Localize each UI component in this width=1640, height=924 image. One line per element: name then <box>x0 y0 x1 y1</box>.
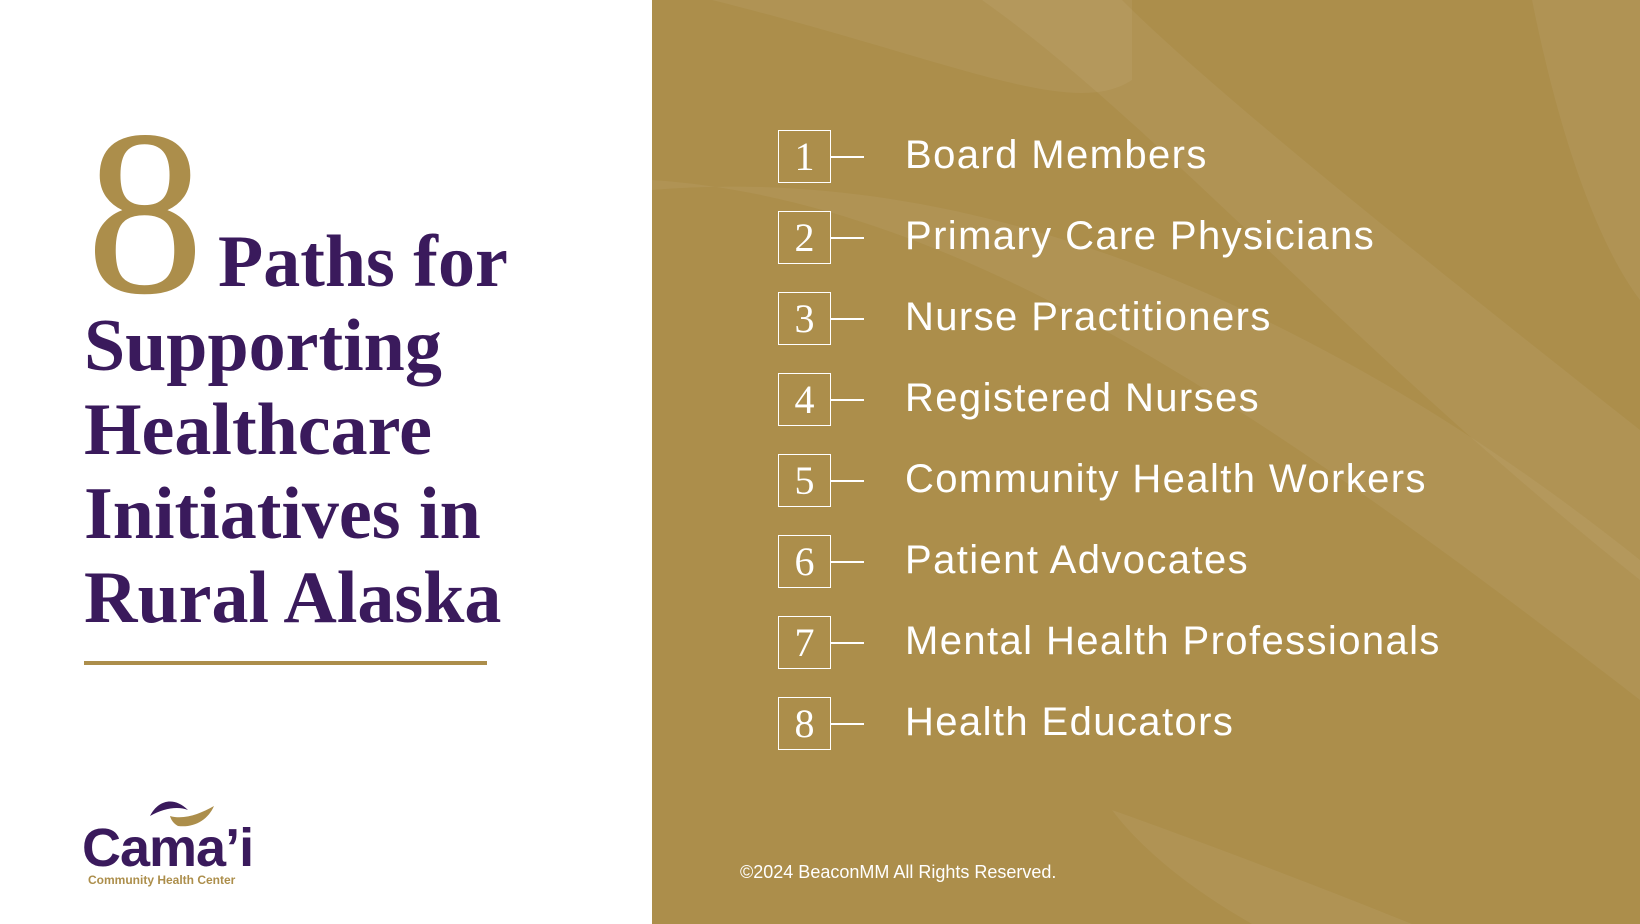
list item 4: Registered Nurses <box>905 376 1260 420</box>
list item 8 <box>778 697 1234 750</box>
copyright: ©2024 BeaconMM All Rights Reserved. <box>740 862 1056 882</box>
list item 2: 2 <box>794 215 814 260</box>
list item 2 <box>778 211 1375 264</box>
list item 7: Mental Health Professionals <box>905 619 1441 663</box>
list item 1 <box>778 130 1208 183</box>
list item 6 <box>778 535 1249 588</box>
title: heading text <box>84 221 508 639</box>
title: big 8: 8 <box>86 83 204 344</box>
list item 3: Nurse Practitioners <box>905 295 1272 339</box>
logo: Camai <box>82 802 253 887</box>
list item 3: 3 <box>794 296 814 341</box>
title: heading text: Rural Alaska <box>84 557 501 639</box>
list item 5: Community Health Workers <box>905 457 1427 501</box>
panel: gold right background <box>652 0 1640 924</box>
list item 1: Board Members <box>905 133 1208 177</box>
list item 7 <box>778 616 1441 669</box>
list item 4 <box>778 373 1260 426</box>
list item 1: 1 <box>794 134 814 179</box>
list item 2: Primary Care Physicians <box>905 214 1375 258</box>
list item 8: Health Educators <box>905 700 1234 744</box>
list item 7: 7 <box>794 620 814 665</box>
list item 6: Patient Advocates <box>905 538 1249 582</box>
list item 8: 8 <box>794 701 814 746</box>
title: heading text: Supporting <box>84 305 442 387</box>
title: heading text: Initiatives in <box>84 473 481 555</box>
list item 4: 4 <box>794 377 814 422</box>
title: heading text: Paths for <box>218 221 508 303</box>
list item 3 <box>778 292 1272 345</box>
title: heading text: Healthcare <box>84 389 432 471</box>
list item 6: 6 <box>794 539 814 584</box>
logo: Camai: Community Health Center <box>88 873 235 887</box>
underline <box>84 661 487 665</box>
list item 5: 5 <box>794 458 814 503</box>
icon: logo swoosh <box>150 802 214 826</box>
list item 5 <box>778 454 1427 507</box>
logo text: Cama’i <box>82 818 253 878</box>
